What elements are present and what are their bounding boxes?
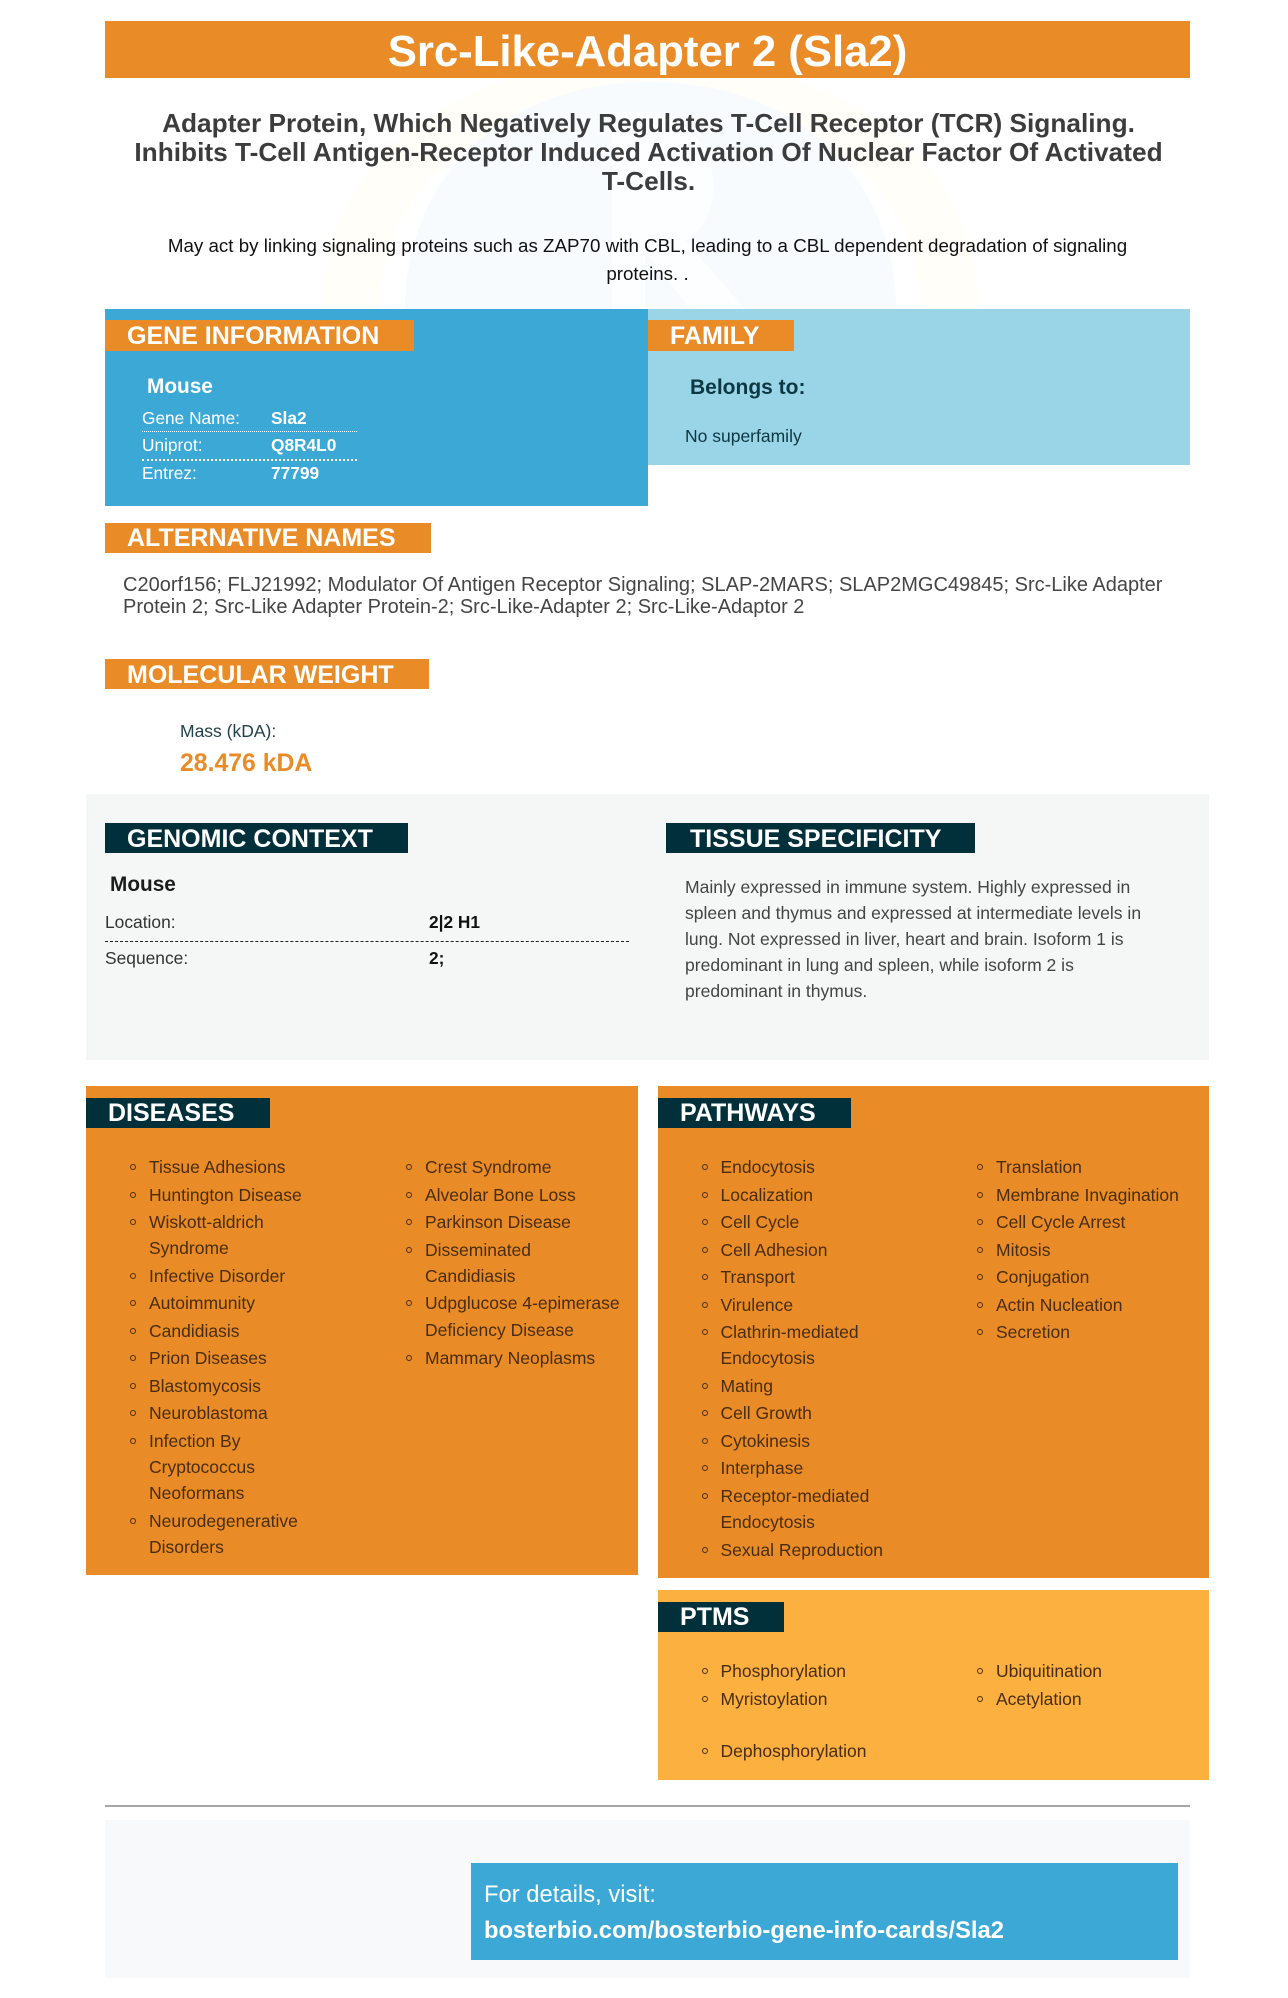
gene name row: Sla2 (271, 408, 307, 428)
pathway list column 1: Cell Cycle (720, 1212, 799, 1232)
disease list column 1: Blastomycosis (149, 1376, 261, 1396)
tissue specificity text: lung. Not expressed in liver, heart and brain. Isoform 1 is (685, 929, 1124, 949)
pathway list column 2: Cell Cycle Arrest (996, 1212, 1125, 1232)
location row: 2|2 H1 (429, 912, 480, 932)
pathway list column 1: Receptor-mediated (720, 1486, 869, 1506)
uniprot row (142, 435, 336, 455)
disease list column 2: Disseminated (425, 1240, 531, 1260)
pathway list column 2: Actin Nucleation (996, 1295, 1122, 1315)
disease list column 1 (130, 1157, 302, 1557)
title banner (105, 21, 1190, 78)
heading: pathways: PATHWAYS (680, 1099, 816, 1127)
footer panel (105, 1820, 1190, 1978)
heading: ptms (658, 1602, 784, 1632)
ptm list column 1 (702, 1661, 866, 1761)
panel: ptms (658, 1590, 1209, 1780)
disease list column 1: Wiskott-aldrich (149, 1212, 264, 1232)
pathway list column 1 (702, 1157, 883, 1560)
visit link: bosterbio.com/bosterbio-gene-info-cards/Sla2 (484, 1917, 1004, 1944)
pathway list column 1: Interphase (720, 1458, 803, 1478)
heading: ptms: PTMS (680, 1603, 749, 1631)
mass value: 28.476 kDA (180, 750, 312, 777)
panel: genomic context and tissue specificity (86, 794, 1209, 1060)
heading: diseases: DISEASES (108, 1099, 234, 1127)
heading: genomic context: GENOMIC CONTEXT (127, 825, 373, 853)
heading: gene information: GENE INFORMATION (127, 322, 379, 350)
subtitle (134, 108, 1163, 196)
pathway list column 2: Secretion (996, 1322, 1070, 1342)
ptm list column 2: Acetylation (996, 1689, 1082, 1709)
disease list column 2: Alveolar Bone Loss (425, 1185, 576, 1205)
disease list column 1: Infection By (149, 1431, 240, 1451)
pathway list column 1: Endocytosis (720, 1157, 815, 1177)
disease list column 2 (406, 1157, 620, 1368)
species: Mouse (110, 873, 176, 896)
tissue specificity text: Mainly expressed in immune system. Highly expressed in (685, 877, 1130, 897)
disease list column 1: Tissue Adhesions (149, 1157, 286, 1177)
pathway list column 1: Cell Growth (720, 1403, 812, 1423)
alternative names text: Protein 2; Src-Like Adapter Protein-2; Src-Like-Adapter 2; Src-Like-Adaptor 2 (123, 596, 804, 618)
ptm list column 1: Myristoylation (720, 1689, 827, 1709)
disease list column 2: Candidiasis (425, 1266, 515, 1286)
disease list column 1: Cryptococcus (149, 1457, 255, 1477)
alternative names text (123, 574, 1162, 618)
heading: diseases (86, 1098, 270, 1128)
pathway list column 1: Cytokinesis (720, 1431, 810, 1451)
title: Src-Like-Adapter 2 (Sla2) (388, 27, 907, 76)
disease list column 2: Crest Syndrome (425, 1157, 551, 1177)
pathway list column 1: Localization (720, 1185, 813, 1205)
pathway list column 2: Conjugation (996, 1267, 1089, 1287)
disease list column 1: Huntington Disease (149, 1185, 302, 1205)
pathway list column 1: Virulence (720, 1295, 793, 1315)
location row: Location: (105, 912, 176, 932)
panel: gene information (105, 309, 648, 506)
pathway list column 1: Transport (720, 1267, 795, 1287)
entrez row: Entrez: (142, 463, 197, 483)
tissue specificity text (685, 877, 1141, 1001)
tissue specificity text: predominant in thymus. (685, 981, 867, 1001)
pathway list column 1: Sexual Reproduction (720, 1540, 883, 1560)
species: Mouse (147, 375, 213, 398)
pathway list column 1: Endocytosis (720, 1512, 815, 1532)
description (168, 234, 1127, 284)
disease list column 1: Autoimmunity (149, 1293, 255, 1313)
location row (105, 912, 480, 932)
mass label: Mass (kDA): (180, 721, 276, 741)
disease list column 1: Neurodegenerative (149, 1511, 298, 1531)
sequence row (105, 948, 444, 968)
alternative names text: C20orf156; FLJ21992; Modulator Of Antigen Receptor Signaling; SLAP-2MARS; SLAP2MGC49845; Src-Like Adapter (123, 574, 1162, 596)
tissue specificity text: spleen and thymus and expressed at intermediate levels in (685, 903, 1141, 923)
belongs to label: Belongs to: (690, 376, 806, 399)
sequence row: 2; (429, 948, 444, 968)
pathway list column 2: Translation (996, 1157, 1082, 1177)
pathway list column 2: Membrane Invagination (996, 1185, 1179, 1205)
heading: family (648, 320, 794, 351)
tissue specificity text: predominant in lung and spleen, while isoform 2 is (685, 955, 1074, 975)
disease list column 2: Mammary Neoplasms (425, 1348, 595, 1368)
disease list column 1: Candidiasis (149, 1321, 239, 1341)
sequence row: Sequence: (105, 948, 188, 968)
panel: pathways (658, 1086, 1209, 1578)
disease list column 1: Neuroblastoma (149, 1403, 268, 1423)
subtitle: Adapter Protein, Which Negatively Regulates T-Cell Receptor (TCR) Signaling. (162, 108, 1135, 138)
heading: family: FAMILY (670, 322, 759, 350)
pathway list column 2: Mitosis (996, 1240, 1050, 1260)
pathway list column 1: Clathrin-mediated (720, 1322, 859, 1342)
heading: molecular weight: MOLECULAR WEIGHT (127, 661, 394, 689)
family value: No superfamily (685, 426, 802, 446)
uniprot row: Q8R4L0 (271, 435, 336, 455)
gene name row (142, 408, 307, 428)
call to action box (471, 1863, 1178, 1960)
disease list column 1: Prion Diseases (149, 1348, 267, 1368)
disease list column 1: Disorders (149, 1537, 224, 1557)
visit label: For details, visit: (484, 1881, 656, 1908)
disease list column 1: Infective Disorder (149, 1266, 285, 1286)
pathway list column 2 (977, 1157, 1179, 1342)
heading: tissue specificity: TISSUE SPECIFICITY (690, 825, 941, 853)
pathway list column 1: Mating (720, 1376, 773, 1396)
description: May act by linking signaling proteins such as ZAP70 with CBL, leading to a CBL dependent degradation of signaling (168, 234, 1127, 256)
panel: diseases (86, 1086, 638, 1575)
ptm list column 1: Phosphorylation (720, 1661, 846, 1681)
subtitle: T-Cells. (602, 166, 695, 196)
pathway list column 1: Endocytosis (720, 1348, 815, 1368)
uniprot row: Uniprot: (142, 435, 203, 455)
disease list column 2: Deficiency Disease (425, 1320, 574, 1340)
gene name row: Gene Name: (142, 408, 240, 428)
description: proteins. . (606, 262, 689, 284)
disease list column 2: Parkinson Disease (425, 1212, 571, 1232)
panel: family (648, 309, 1190, 465)
subtitle: Inhibits T-Cell Antigen-Receptor Induced Activation Of Nuclear Factor Of Activated (134, 136, 1163, 166)
entrez row: 77799 (271, 463, 319, 483)
heading: alternative names: ALTERNATIVE NAMES (127, 524, 396, 552)
watermark logo (0, 0, 1288, 520)
ptm list column 1: Dephosphorylation (720, 1741, 866, 1761)
ptm list column 2 (977, 1661, 1102, 1709)
ptm list column 2: Ubiquitination (996, 1661, 1102, 1681)
disease list column 2: Udpglucose 4-epimerase (425, 1293, 620, 1313)
disease list column 1: Neoformans (149, 1483, 244, 1503)
pathway list column 1: Cell Adhesion (720, 1240, 828, 1260)
heading: pathways (658, 1098, 851, 1128)
disease list column 1: Syndrome (149, 1238, 229, 1258)
entrez row (142, 463, 319, 483)
